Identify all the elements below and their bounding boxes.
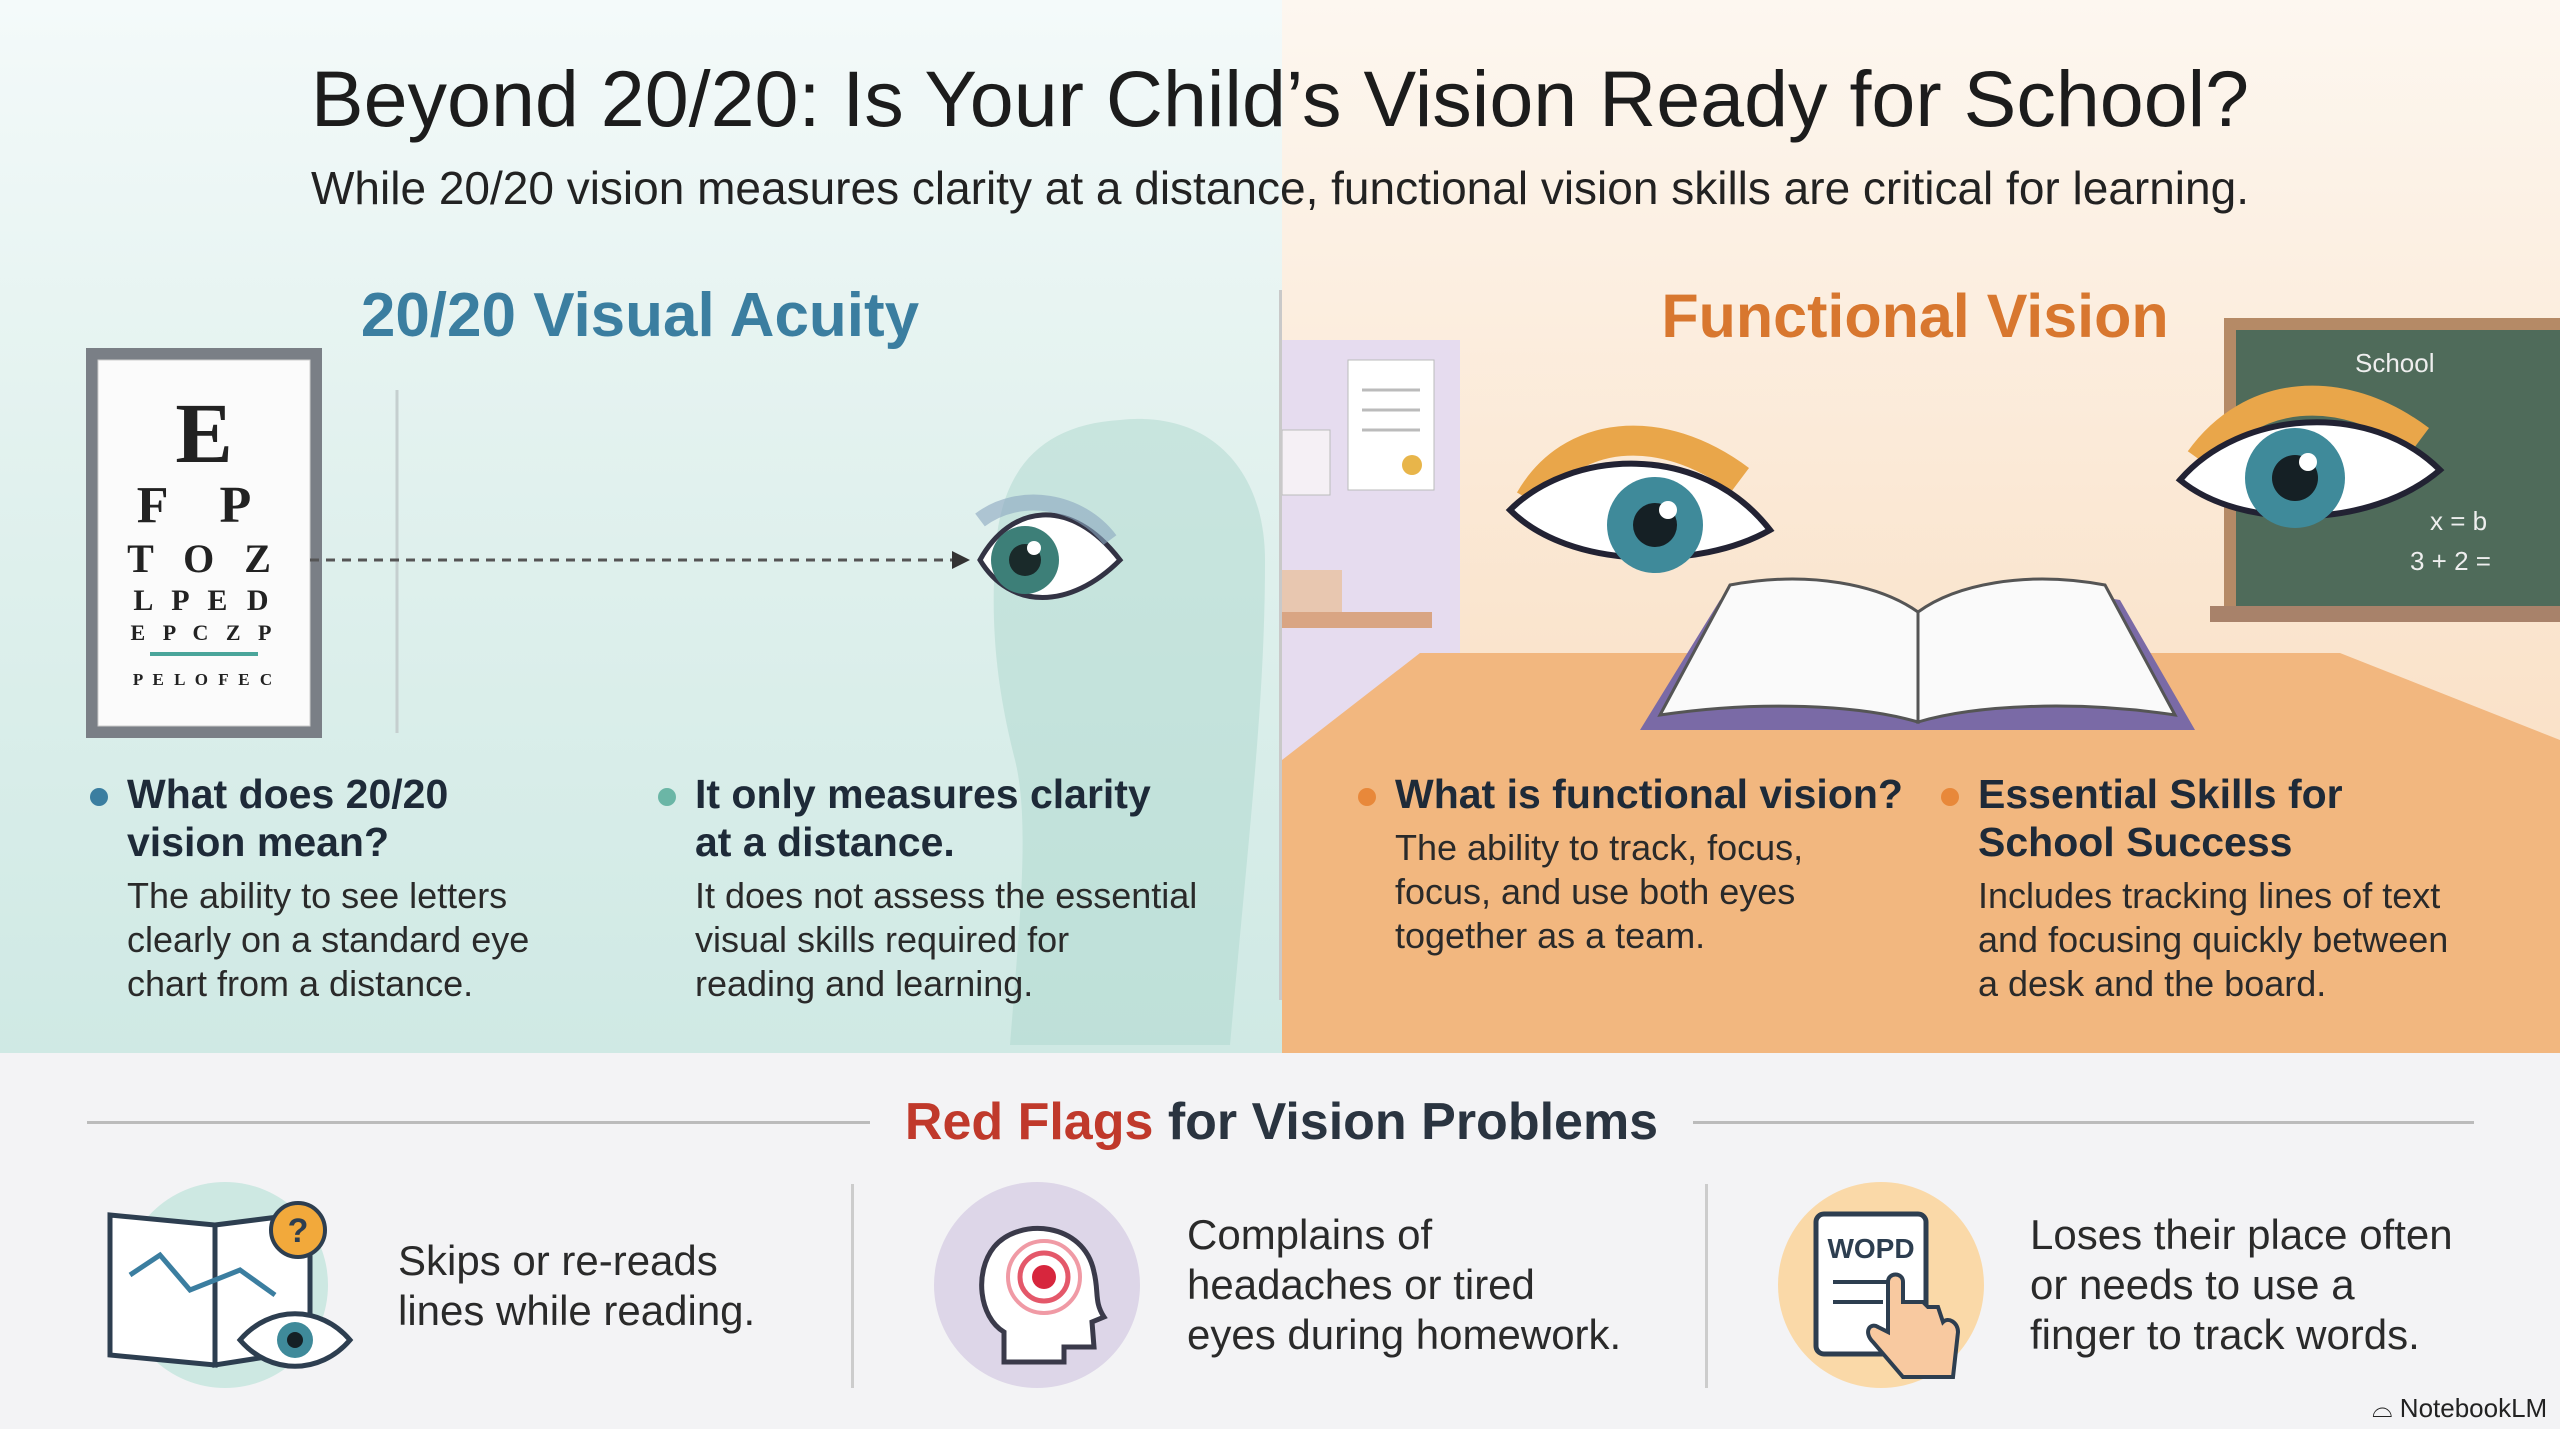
eye xyxy=(980,503,1120,598)
eye left xyxy=(1510,441,1770,573)
bullet: what is functional vision: The ability to track, focus, xyxy=(1395,827,1803,868)
bullet: what does 20/20 mean: chart from a distance. xyxy=(127,963,473,1004)
bullet: only measures clarity xyxy=(658,771,1197,1004)
red flags heading: Red Flags for Vision Problems xyxy=(905,1093,1658,1151)
eye chart: E P C Z P xyxy=(131,620,277,645)
eye chart: T O Z xyxy=(127,536,281,581)
bullet: only measures clarity: reading and learning. xyxy=(695,963,1033,1004)
eye right xyxy=(2180,401,2440,528)
bullet: only measures clarity: at a distance. xyxy=(695,819,955,865)
bullet: what does 20/20 mean: vision mean? xyxy=(127,819,389,865)
text: loses place: finger to track words. xyxy=(2030,1311,2420,1358)
bullet: what does 20/20 mean: The ability to see letters xyxy=(127,875,507,916)
icon: head with headache xyxy=(934,1182,1140,1388)
bullet: what is functional vision: together as a team. xyxy=(1395,915,1705,956)
divider xyxy=(1279,290,1282,1000)
icon: book with eye xyxy=(108,1182,354,1388)
text: loses place: Loses their place often xyxy=(2030,1211,2453,1258)
bullet: only measures clarity: It does not assess the essential xyxy=(695,875,1197,916)
text: headaches xyxy=(1187,1211,1621,1358)
illustration: classroom with eyes and book xyxy=(1282,318,2560,1053)
bullet: essential skills: and focusing quickly between xyxy=(1978,919,2448,960)
text: skips: lines while reading. xyxy=(398,1287,755,1334)
icon: book with eye: ? xyxy=(288,1212,308,1250)
illustration: classroom with eyes and book: School xyxy=(2355,348,2434,378)
logo: NotebookLM: ⌓ NotebookLM xyxy=(2372,1393,2547,1423)
eye chart: F P xyxy=(137,477,271,534)
bullet: only measures clarity: It only measures clarity xyxy=(695,771,1151,817)
illustration: classroom with eyes and book: x = b xyxy=(2430,506,2487,536)
red flags heading xyxy=(87,1093,2474,1151)
heading: Functional Vision: Functional Vision xyxy=(1661,282,2169,350)
heading: 20/20 Visual Acuity: 20/20 Visual Acuity xyxy=(361,281,919,350)
bullet: only measures clarity: visual skills required for xyxy=(695,919,1069,960)
text: loses place xyxy=(2030,1211,2453,1358)
icon: word card with finger: WOPD xyxy=(1827,1233,1915,1264)
title: Beyond 20/20: Is Your Child’s Vision Ready for School? xyxy=(311,54,2249,143)
eye chart: L P E D xyxy=(133,584,275,617)
book xyxy=(1640,579,2195,730)
eye chart: P E L O F E C xyxy=(133,670,275,689)
bullet: what does 20/20 mean: What does 20/20 xyxy=(127,771,448,817)
bullet: what is functional vision: What is functional vision? xyxy=(1395,771,1903,817)
background panels xyxy=(0,0,2560,1053)
icon: word card with finger xyxy=(1778,1182,1984,1388)
bullet: what is functional vision: focus, and use both eyes xyxy=(1395,871,1795,912)
bullet: what is functional vision xyxy=(1358,771,1903,956)
bullet: essential skills: a desk and the board. xyxy=(1978,963,2326,1004)
text: skips xyxy=(398,1237,755,1334)
subtitle: While 20/20 vision measures clarity at a distance, functional vision skills are critical for learning. xyxy=(311,162,2249,214)
bullet: essential skills: School Success xyxy=(1978,819,2292,865)
text: headaches: Complains of xyxy=(1187,1211,1432,1258)
text: headaches: eyes during homework. xyxy=(1187,1311,1621,1358)
bullet: essential skills: Essential Skills for xyxy=(1978,771,2343,817)
text: skips: Skips or re-reads xyxy=(398,1237,718,1284)
text: loses place: or needs to use a xyxy=(2030,1261,2355,1308)
bullet: what does 20/20 mean: clearly on a standard eye xyxy=(127,919,529,960)
head silhouette xyxy=(994,419,1265,1045)
text: headaches: headaches or tired xyxy=(1187,1261,1535,1308)
table xyxy=(1282,653,2560,1053)
bullet: essential skills: Includes tracking lines of text xyxy=(1978,875,2440,916)
illustration: classroom with eyes and book: 3 + 2 = xyxy=(2410,546,2491,576)
eye chart xyxy=(86,348,322,738)
eye chart: E xyxy=(175,385,233,481)
bullet: what does 20/20 mean xyxy=(90,771,529,1004)
separators xyxy=(851,1184,854,1388)
bullet: essential skills xyxy=(1941,771,2448,1004)
chalkboard xyxy=(2224,318,2560,618)
illustration: eye chart and eye xyxy=(86,348,1265,1045)
dashed line xyxy=(310,558,955,562)
